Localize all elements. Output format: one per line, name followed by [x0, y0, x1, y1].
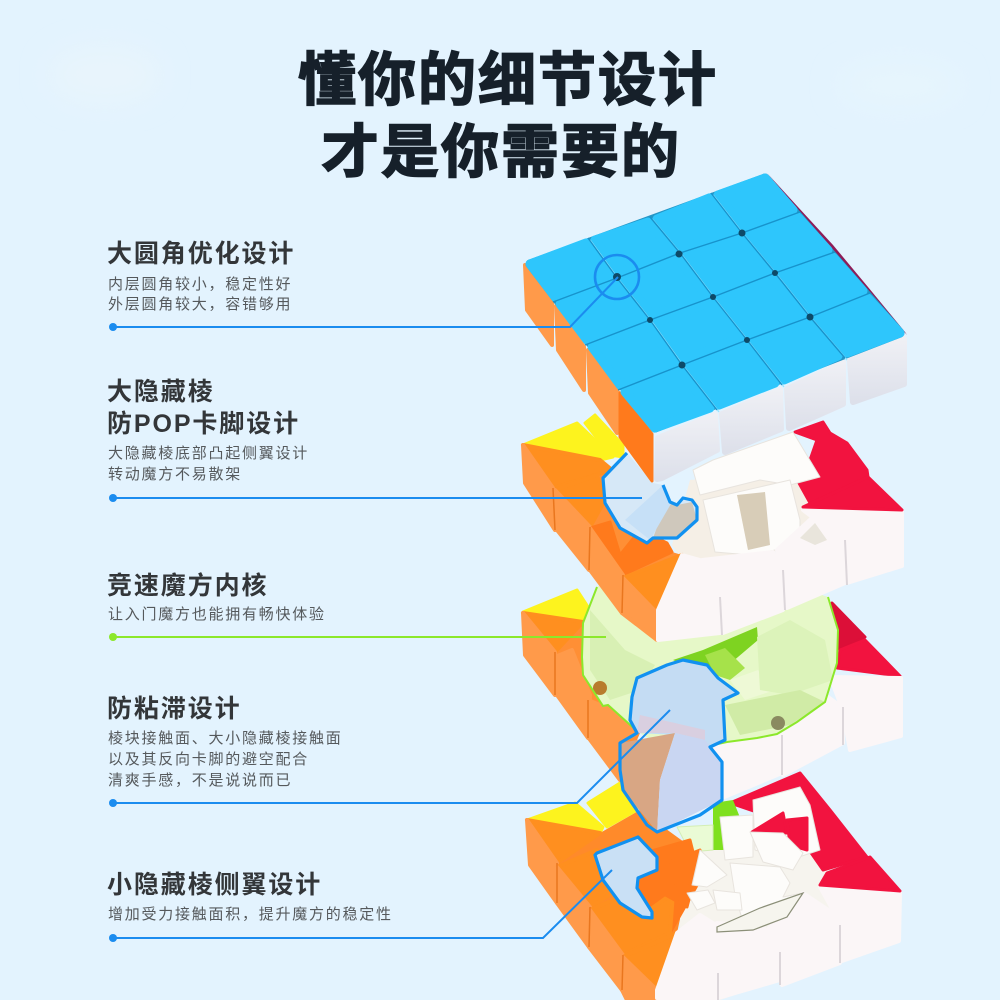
glowing core highlight: [582, 560, 838, 745]
leader line 4: [109, 710, 670, 807]
leader line 5: [109, 870, 612, 942]
description 3: 让入门魔方也能拥有畅快体验: [108, 606, 326, 623]
description 1: 外层圆角较大，容错够用: [108, 295, 292, 313]
description 5: 增加受力接触面积，提升魔方的稳定性: [108, 906, 393, 923]
description 1: 内层圆角较小，稳定性好: [108, 275, 292, 293]
description 2: 大隐藏棱底部凸起侧翼设计: [108, 445, 309, 462]
title: 懂你的细节设计: [298, 48, 718, 113]
callout 5: small wing text: [107, 870, 612, 942]
cube layer 3: glowing core layer: [523, 560, 901, 832]
title: [298, 48, 718, 185]
description 4: 清爽手感，不是说说而已: [108, 772, 292, 789]
heading 1: 大圆角优化设计: [107, 240, 295, 268]
callout: small hidden edge wing outline: [595, 837, 657, 918]
heading 2: 大隐藏棱: [107, 378, 215, 406]
description 1: [108, 275, 292, 313]
cube layer 4: bottom open layer: [527, 773, 900, 1000]
top face stickers: [530, 178, 900, 428]
heading 4: 防粘滞设计: [107, 695, 242, 723]
callout: hidden edge side wing: [603, 453, 697, 543]
heading 5: 小隐藏棱侧翼设计: [107, 871, 322, 899]
leader line 3: [109, 633, 606, 641]
leader line 2: [109, 494, 642, 502]
heading 2: 防POP卡脚设计: [107, 410, 300, 438]
description 4: 以及其反向卡脚的避空配合: [108, 751, 309, 768]
callout 3: speed core text: [107, 571, 606, 641]
heading 2: [107, 378, 300, 438]
description 4: 棱块接触面、大小隐藏棱接触面: [108, 730, 343, 747]
cube top layer: [525, 173, 907, 481]
callout 1: rounded corner text: [107, 240, 639, 331]
heading 3: 竞速魔方内核: [107, 571, 268, 600]
description 2: 转动魔方不易散架: [108, 466, 242, 483]
description 4: [108, 730, 343, 789]
leader line 1: [109, 255, 639, 331]
callout 2: hidden edge text: [107, 378, 642, 502]
description 2: [108, 445, 309, 483]
callout 4: anti-stick text: [107, 695, 670, 807]
title: 才是你需要的: [321, 120, 681, 185]
cube layer 2: white core layer: [523, 415, 902, 640]
callout: anti-stick piece: [620, 660, 738, 832]
